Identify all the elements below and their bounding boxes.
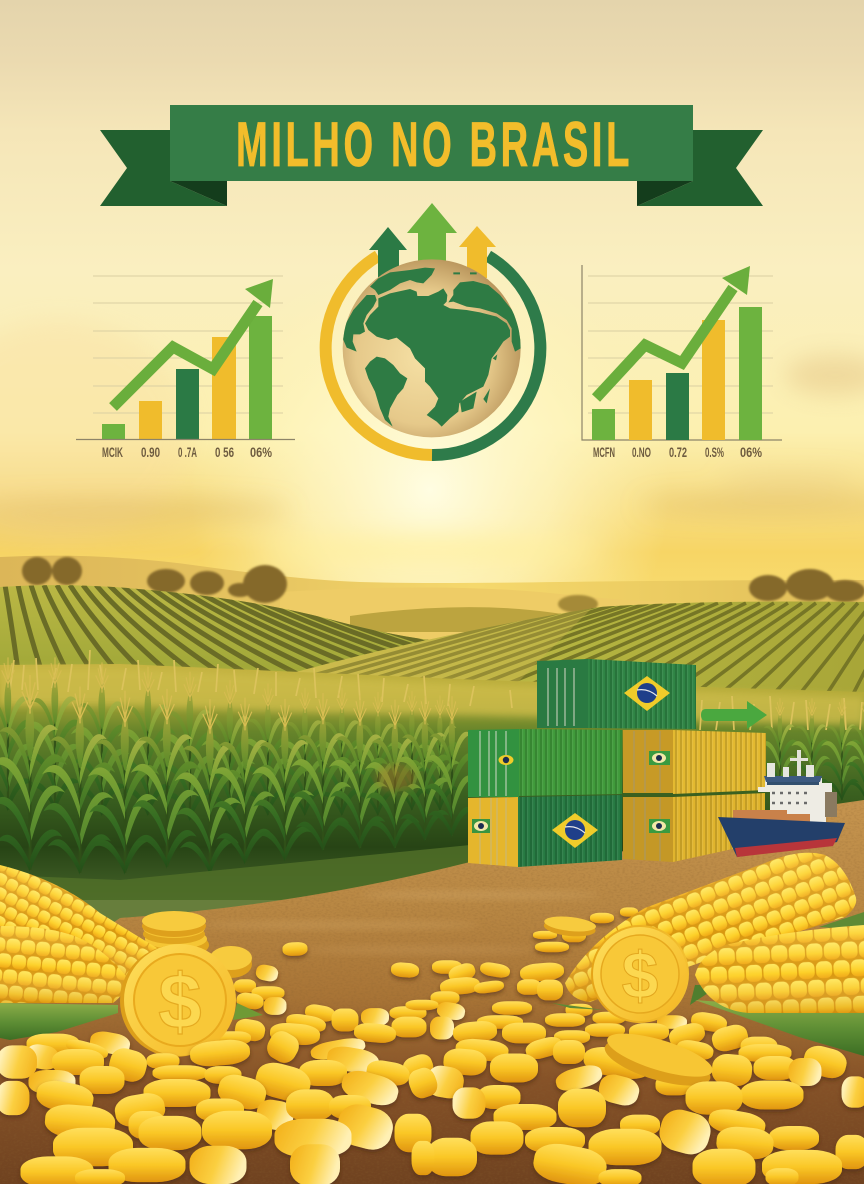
flag: [552, 813, 598, 848]
scattered kernels: near layer: [0, 1027, 850, 1106]
tassel line: [10, 650, 862, 730]
axis labels: 0.NO: [632, 444, 651, 460]
striped crop hill: left: [0, 585, 429, 672]
ribbon tails: [100, 130, 763, 206]
globe: [343, 259, 521, 437]
corn husk: left: [0, 1003, 263, 1040]
bars: [592, 307, 762, 440]
corn cob: left lower: [0, 926, 126, 1003]
flag: [624, 676, 670, 711]
axis labels: MCIK: [102, 444, 123, 460]
axis labels: 0.S%: [705, 444, 724, 460]
axis labels: [102, 444, 272, 460]
corn cob: right upper: [565, 853, 856, 1002]
tassel haze: [0, 668, 864, 725]
ribbon body: [170, 105, 693, 181]
axis labels: [593, 444, 762, 460]
sunset clouds: [0, 474, 864, 564]
scattered kernels: far layer: [215, 907, 750, 1054]
flat gold coin: foreground: [600, 1025, 717, 1095]
corn husk: right: [552, 912, 864, 1010]
sky background: [0, 0, 864, 600]
cargo ship: [718, 750, 845, 857]
bars: [102, 316, 272, 439]
title banner: [100, 105, 763, 206]
flat coin: back right: [543, 914, 597, 939]
gold coin with dollar: right: $: [622, 938, 658, 1012]
container: bottom left: [468, 795, 622, 867]
axis labels: 0 .7A: [178, 444, 197, 460]
grass strip: [0, 845, 470, 925]
shipping containers: [468, 659, 766, 867]
bar chart: left: [76, 276, 295, 460]
striped crop hill: right: [296, 602, 864, 692]
container: top green: [537, 659, 696, 729]
axis labels: 0 56: [215, 444, 234, 460]
field base: [0, 664, 864, 900]
trend arrow: [113, 279, 273, 407]
orange haze spot: [376, 764, 416, 792]
axis labels: 06%: [250, 444, 272, 460]
back row plants: [0, 657, 462, 821]
container: middle left green: [468, 729, 622, 797]
axis labels: 06%: [740, 444, 762, 460]
growth arrows: [369, 203, 496, 278]
axis labels: 0.90: [141, 444, 160, 460]
dirt road and ground: [0, 800, 864, 1184]
axis labels: 0.72: [669, 444, 687, 460]
gold coin with dollar: left: $: [158, 957, 202, 1045]
distant hills: [0, 556, 864, 640]
gold coin with dollar: right: [591, 925, 689, 1023]
scattered kernels: foreground layer: [0, 1067, 864, 1184]
corn cob: right lower with husk: [695, 925, 864, 1056]
container: middle right yellow: [623, 730, 766, 794]
container: bottom right yellow: [623, 793, 765, 862]
growth ring: [326, 256, 540, 455]
corn field: [0, 650, 864, 900]
gold coin stack: left: [142, 911, 252, 978]
front row plants: [0, 675, 478, 875]
arrow: export direction: [701, 701, 767, 729]
gold coin with dollar: left: [120, 944, 236, 1057]
globe emblem: [326, 203, 540, 455]
axis labels: MCFN: [593, 444, 615, 460]
bar chart: right: [582, 265, 782, 460]
right side plants: [759, 698, 864, 801]
corn cob: left upper: [0, 865, 157, 990]
trend arrow: [596, 266, 750, 398]
trees: [22, 557, 864, 613]
